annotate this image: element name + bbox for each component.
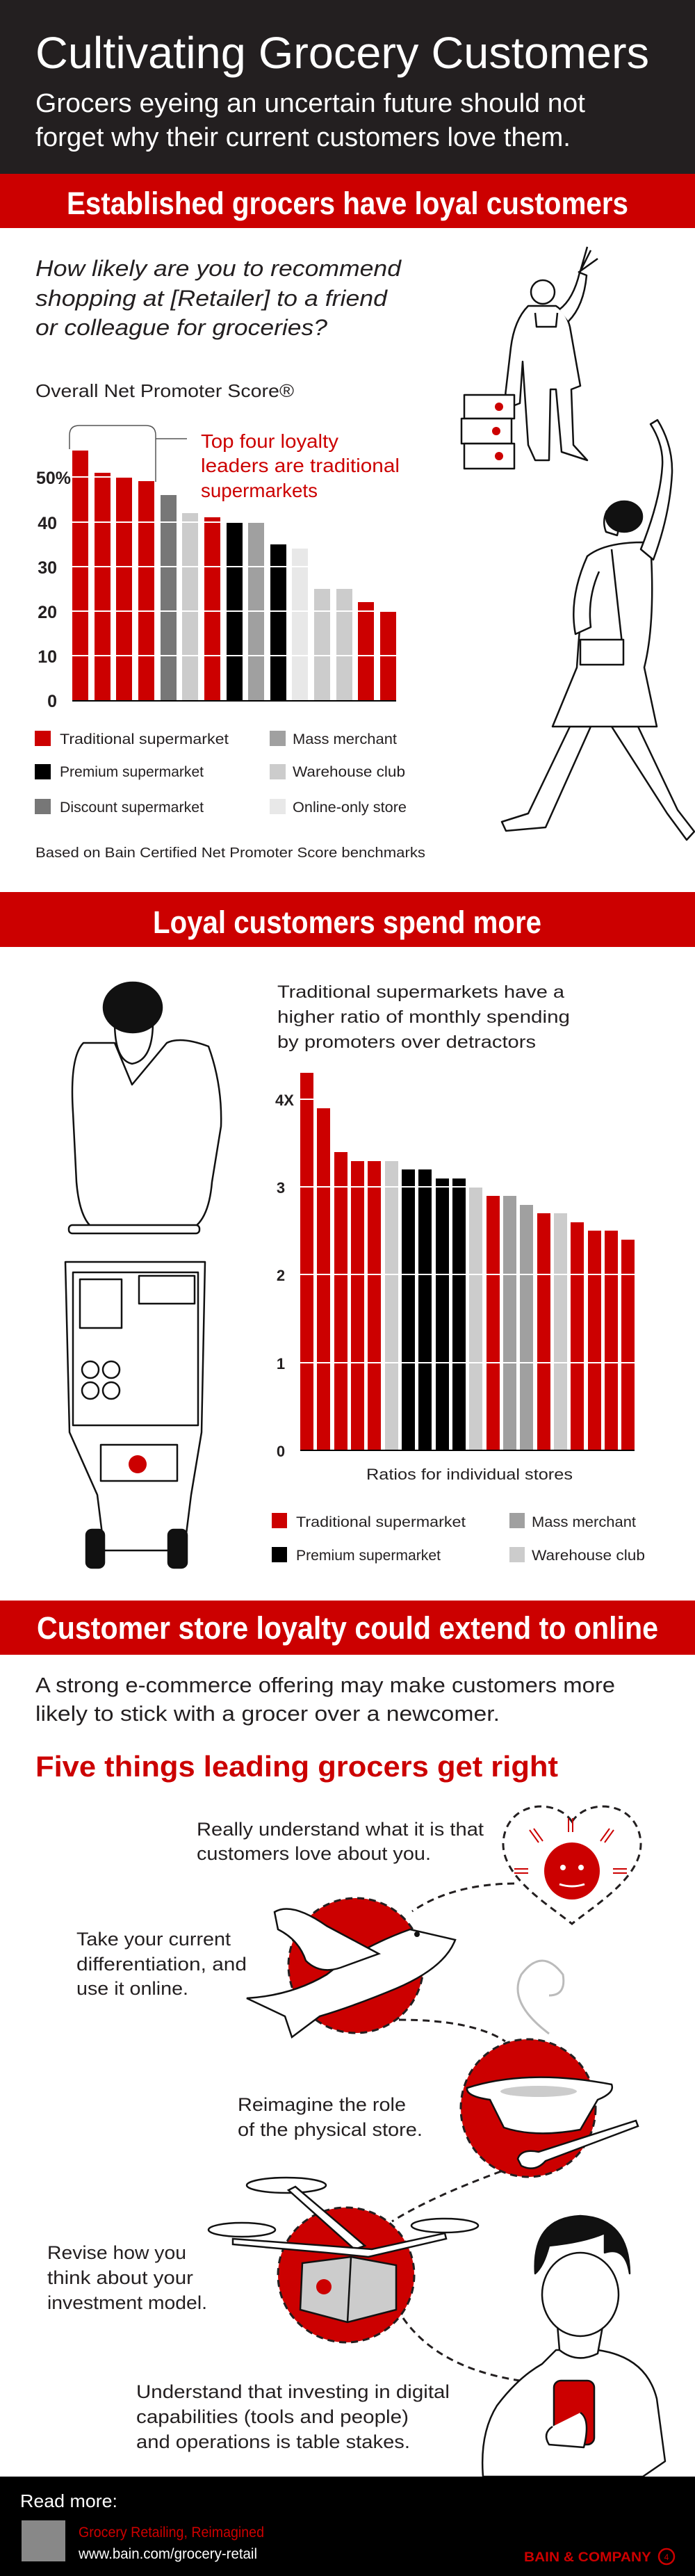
item 3 text: of the physical store. <box>238 2119 423 2140</box>
chart 2 intro text: Traditional supermarkets have a <box>277 982 564 1002</box>
chart 2 intro text <box>277 982 570 1052</box>
legend chart 2: Warehouse club <box>532 1548 645 1564</box>
chart 2 intro text: higher ratio of monthly spending <box>277 1007 570 1027</box>
footer panel <box>0 2477 695 2576</box>
logo: Bain & Company: 4 <box>664 2552 669 2562</box>
bar chart: spending ratio <box>275 1073 636 1483</box>
survey question: How likely are you to recommend <box>35 256 402 281</box>
report thumbnail <box>22 2520 65 2561</box>
x axis label: Ratios for individual stores <box>366 1466 573 1483</box>
item 1 text <box>197 1819 484 1864</box>
survey question: shopping at [Retailer] to a friend <box>35 286 388 311</box>
callout: top four loyalty leaders: leaders are traditional <box>201 455 400 476</box>
legend chart 1 <box>35 731 407 816</box>
y axis labels: 0 <box>277 1443 285 1460</box>
source note: Based on Bain Certified Net Promoter Score benchmarks <box>35 845 425 861</box>
subheading: five things: Five things leading grocers get right <box>35 1750 558 1783</box>
survey question: or colleague for groceries? <box>35 315 327 340</box>
item 5 text: and operations is table stakes. <box>136 2431 410 2452</box>
callout: top four loyalty leaders: Top four loyalty <box>201 430 338 452</box>
section band 2 heading <box>0 892 695 947</box>
item 4 text: think about your <box>47 2267 193 2288</box>
icon: heart with smiley <box>503 1806 641 1924</box>
illustration: waving woman with handbag <box>502 420 694 840</box>
illustration: shopper pushing cart <box>65 982 221 1568</box>
legend chart 1: Mass merchant <box>293 731 397 747</box>
legend chart 2: Premium supermarket <box>296 1548 441 1564</box>
icon: bowl and spoon <box>461 2039 638 2177</box>
intro paragraph <box>35 1673 615 1726</box>
icon: delivery drone with box <box>208 2178 478 2342</box>
y axis labels: 4X <box>275 1092 294 1109</box>
legend chart 1: Warehouse club <box>293 764 405 780</box>
legend chart 2: Traditional supermarket <box>296 1514 466 1530</box>
legend chart 1: Discount supermarket <box>60 800 204 816</box>
item 2 text: use it online. <box>76 1978 188 1999</box>
read more label: Read more: <box>20 2490 117 2511</box>
item 1 text: Really understand what it is that <box>197 1819 484 1840</box>
title: Cultivating Grocery Customers <box>35 28 649 78</box>
icon: hand holding fish <box>247 1898 455 2037</box>
survey question <box>35 256 402 340</box>
logo: Bain & Company: BAIN & COMPANY <box>524 2550 651 2565</box>
y axis labels: 0 <box>47 692 57 711</box>
item 1 text: customers love about you. <box>197 1843 431 1864</box>
callout: top four loyalty leaders: supermarkets <box>201 480 318 501</box>
item 5 text <box>136 2381 450 2452</box>
y axis labels <box>275 1092 294 1460</box>
item 5 text: capabilities (tools and people) <box>136 2406 409 2427</box>
subtitle: forget why their current customers love them. <box>35 123 571 152</box>
item 2 text <box>76 1929 247 1999</box>
y axis labels: 1 <box>277 1355 285 1372</box>
y axis labels: 3 <box>277 1179 285 1197</box>
item 2 text: Take your current <box>76 1929 231 1950</box>
item 3 text: Reimagine the role <box>238 2094 406 2115</box>
y axis labels: 50% <box>36 469 71 488</box>
section band 1 heading: Established grocers have loyal customers <box>67 186 628 221</box>
section band 3 heading <box>0 1601 695 1655</box>
illustration: grocer with boxes <box>461 247 598 469</box>
dashed connector path <box>392 1884 554 2384</box>
y axis labels: 10 <box>38 647 57 667</box>
item 2 text: differentiation, and <box>76 1954 247 1975</box>
legend chart 2: Mass merchant <box>532 1514 636 1530</box>
y axis labels: 30 <box>38 558 57 578</box>
callout: top four loyalty leaders <box>70 426 400 501</box>
bar chart: net promoter score <box>36 451 400 711</box>
legend chart 2 <box>272 1513 645 1564</box>
y axis labels: 40 <box>38 514 57 533</box>
section band 2 heading: Loyal customers spend more <box>153 905 541 940</box>
intro paragraph: A strong e-commerce offering may make customers more <box>35 1673 615 1697</box>
subtitle: Grocers eyeing an uncertain future should not <box>35 89 585 118</box>
footer panel: www.bain.com/grocery-retail <box>78 2546 257 2562</box>
y axis labels: 20 <box>38 603 57 622</box>
subtitle <box>35 89 585 152</box>
legend chart 1: Online-only store <box>293 800 407 816</box>
legend chart 1: Traditional supermarket <box>60 731 229 747</box>
y axis labels <box>36 469 71 711</box>
item 4 text <box>47 2242 207 2313</box>
section band 1 heading <box>0 174 695 228</box>
y axis labels: 2 <box>277 1267 285 1284</box>
illustration: woman with phone <box>482 2216 665 2477</box>
header panel <box>0 0 695 174</box>
legend chart 1: Premium supermarket <box>60 764 204 780</box>
item 5 text: Understand that investing in digital <box>136 2381 450 2402</box>
intro paragraph: likely to stick with a grocer over a newcomer. <box>35 1701 500 1726</box>
item 4 text: investment model. <box>47 2292 207 2313</box>
item 3 text <box>238 2094 423 2140</box>
report link: Grocery Retailing, Reimagined <box>79 2525 264 2541</box>
chart 1 title: Overall Net Promoter Score® <box>35 380 294 401</box>
chart 2 intro text: by promoters over detractors <box>277 1032 536 1052</box>
steam <box>518 1961 564 2034</box>
item 4 text: Revise how you <box>47 2242 186 2263</box>
